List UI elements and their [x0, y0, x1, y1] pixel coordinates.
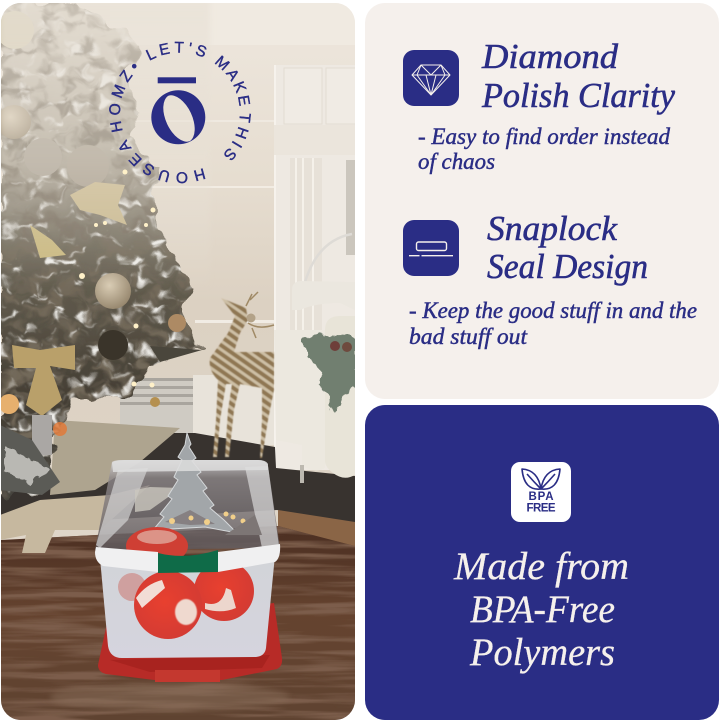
heading: made from BPA-free polymers: BPA-Free [470, 588, 615, 631]
panel: room photo with storage box [0, 0, 356, 720]
glass tree [153, 433, 262, 535]
icon: BPA free badge: FREE [526, 502, 556, 514]
text: keep the good stuff in: bad stuff out [409, 324, 528, 349]
bows [12, 182, 202, 416]
icon: BPA free badge: BPA [528, 491, 554, 503]
red lid [98, 603, 282, 680]
snowy lower trunk [0, 415, 60, 495]
heading: made from BPA-free polymers: Made from [453, 545, 629, 588]
heading: snaplock seal design [487, 209, 648, 286]
circular tagline: THIS [224, 114, 251, 160]
text: easy to find order [418, 124, 671, 174]
text: keep the good stuff in: - Keep the good stuff in and the [409, 298, 697, 323]
icon: snaplock seal [403, 220, 459, 276]
green label [158, 550, 218, 573]
back of box [95, 460, 280, 550]
icon: diamond [403, 50, 459, 106]
circular tagline: • [132, 64, 136, 68]
wall molding [120, 120, 274, 445]
wreath greenery [302, 334, 356, 414]
heading: snaplock seal design: Snaplock [487, 209, 618, 248]
heading: diamond polish clarity [481, 37, 675, 115]
logo mark [151, 77, 205, 144]
wooden floor [0, 526, 355, 720]
white sled panels and chair [274, 234, 356, 483]
wire reindeer [210, 292, 274, 458]
circular tagline [109, 42, 251, 184]
icon: BPA free badge [511, 462, 571, 522]
box rim band [95, 547, 158, 572]
circular tagline: A [119, 139, 132, 150]
heading: made from BPA-free polymers [453, 545, 629, 674]
text: easy to find order: of chaos [418, 149, 495, 174]
ornaments [0, 11, 186, 436]
translucent box body [100, 555, 275, 658]
red ornaments [118, 527, 254, 639]
fireplace mantel [274, 65, 356, 470]
circular tagline: HOUSE [128, 152, 206, 184]
wood baseboard [278, 510, 355, 547]
heading: diamond polish clarity: Diamond [481, 37, 619, 76]
circular tagline: HOMZ [109, 69, 133, 132]
twinkle lights [79, 170, 156, 388]
circular tagline: MAKE [214, 55, 250, 106]
heading: made from BPA-free polymers: Polymers [469, 631, 615, 674]
christmas tree [0, 0, 210, 495]
heading: snaplock seal design: Seal Design [487, 247, 648, 286]
panel: circular logo badge [109, 42, 251, 184]
panel: features [365, 3, 719, 399]
tree skirt [0, 420, 180, 553]
dark floor [0, 433, 355, 525]
text: keep the good stuff in [409, 298, 697, 349]
text: easy to find order: - Easy to find order instead [418, 124, 671, 149]
panel: BPA-free [365, 405, 719, 720]
heading: diamond polish clarity: Polish Clarity [481, 76, 675, 115]
storage box with ornaments [95, 433, 282, 682]
circular tagline: LET'S [146, 42, 206, 60]
